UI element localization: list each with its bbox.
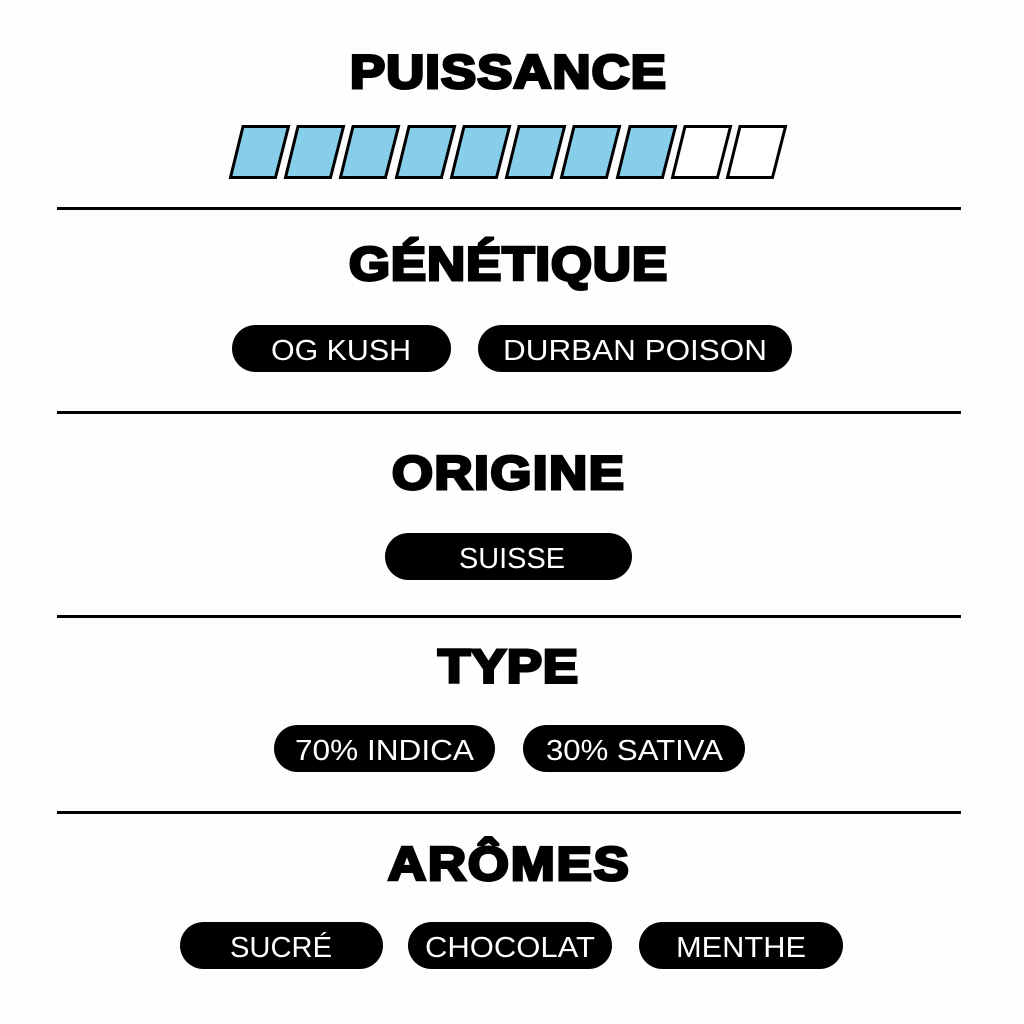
pill: og kush: OG KUSH xyxy=(271,335,411,367)
pill: suisse: SUISSE xyxy=(459,543,565,575)
pill: suisse xyxy=(385,533,632,580)
pill: chocolat: CHOCOLAT xyxy=(425,932,595,964)
heading: origine: ORIGINE xyxy=(392,447,624,499)
pill: sucré xyxy=(180,922,383,969)
pill: durban poison xyxy=(478,325,792,372)
pill: durban poison: DURBAN POISON xyxy=(503,335,767,367)
gauge: puissance 8 of 10 xyxy=(230,126,786,178)
pill: menthe xyxy=(639,922,843,969)
pill: sucré: SUCRÉ xyxy=(230,931,332,964)
pill: og kush xyxy=(232,325,451,372)
heading: puissance: PUISSANCE xyxy=(350,46,666,98)
pill: 70% indica: 70% INDICA xyxy=(295,735,475,767)
pill: menthe: MENTHE xyxy=(676,932,806,964)
pill: chocolat xyxy=(408,922,612,969)
heading: arômes: ARÔMES xyxy=(388,837,629,890)
heading: type: TYPE xyxy=(438,640,578,693)
heading: génétique: GÉNÉTIQUE xyxy=(349,238,667,290)
pill: 30% sativa xyxy=(523,725,745,772)
pill: 70% indica xyxy=(274,725,495,772)
pill: 30% sativa: 30% SATIVA xyxy=(546,735,724,767)
